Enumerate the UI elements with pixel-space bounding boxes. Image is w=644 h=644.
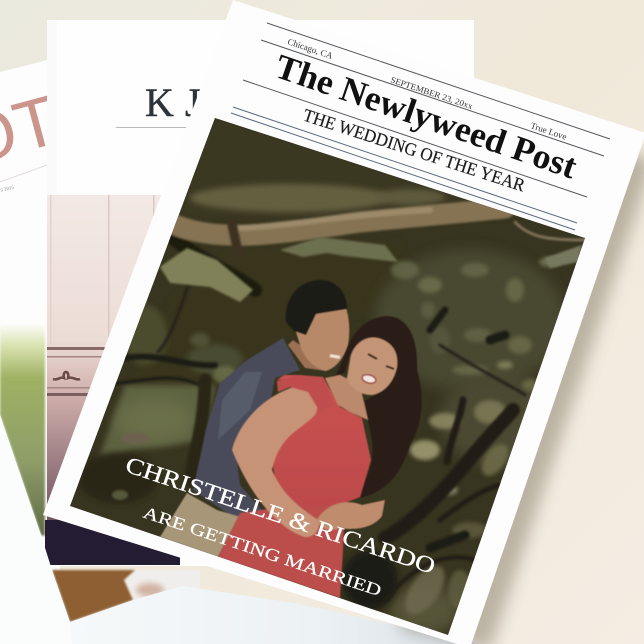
- garden photo: [0, 325, 45, 536]
- monogram: [145, 80, 201, 125]
- dark navy photo strip: [45, 520, 180, 565]
- face: [296, 308, 349, 371]
- masthead rules: [231, 23, 610, 230]
- door ornament: [53, 372, 80, 379]
- neck and chest: [325, 375, 368, 420]
- tree branches: [112, 208, 585, 600]
- woman: [218, 316, 422, 598]
- back centre magazine: [45, 20, 474, 566]
- neck: [288, 340, 326, 371]
- dress sleeve: [276, 376, 320, 408]
- date: SEPTEMBER 23, 20xx: [389, 74, 475, 111]
- monogram: J: [185, 80, 201, 125]
- couple photo: [60, 110, 600, 644]
- foliage backdrop: [78, 118, 565, 634]
- second arm and hand: [317, 500, 385, 530]
- autumn photo: [52, 570, 135, 622]
- trousers: [160, 493, 240, 557]
- mouth: [361, 373, 377, 385]
- location: Chicago, CA: [286, 36, 335, 61]
- rule and small date: 5 2015: [0, 185, 15, 194]
- front cover shadow: [400, 90, 644, 644]
- man: [160, 280, 349, 557]
- dress bodice: [272, 375, 371, 510]
- shirt: [193, 338, 300, 525]
- couple names: CHRISTELLE & RICARDO: [122, 452, 439, 579]
- tagline: True Love: [529, 120, 568, 142]
- hair: [286, 280, 347, 335]
- monogram: K: [145, 80, 174, 125]
- eyes: [368, 354, 394, 369]
- newspaper name: The Newlyweed Post: [270, 47, 582, 187]
- hanging leaves: [160, 237, 582, 302]
- door photo: [47, 195, 177, 520]
- monogram rule: [116, 126, 190, 128]
- skirt: [218, 500, 345, 598]
- face: [347, 337, 397, 395]
- arm and hand: [232, 385, 319, 537]
- leaf and light blotches: [190, 257, 561, 621]
- smile: [330, 354, 340, 359]
- announcement: ARE GETTING MARRIED: [141, 503, 384, 600]
- rule and small date: [0, 165, 47, 194]
- back left magazine: [0, 60, 60, 570]
- headline: THE WEDDING OF THE YEAR: [301, 105, 528, 195]
- lower magazine: [0, 415, 480, 644]
- hair: [335, 316, 422, 500]
